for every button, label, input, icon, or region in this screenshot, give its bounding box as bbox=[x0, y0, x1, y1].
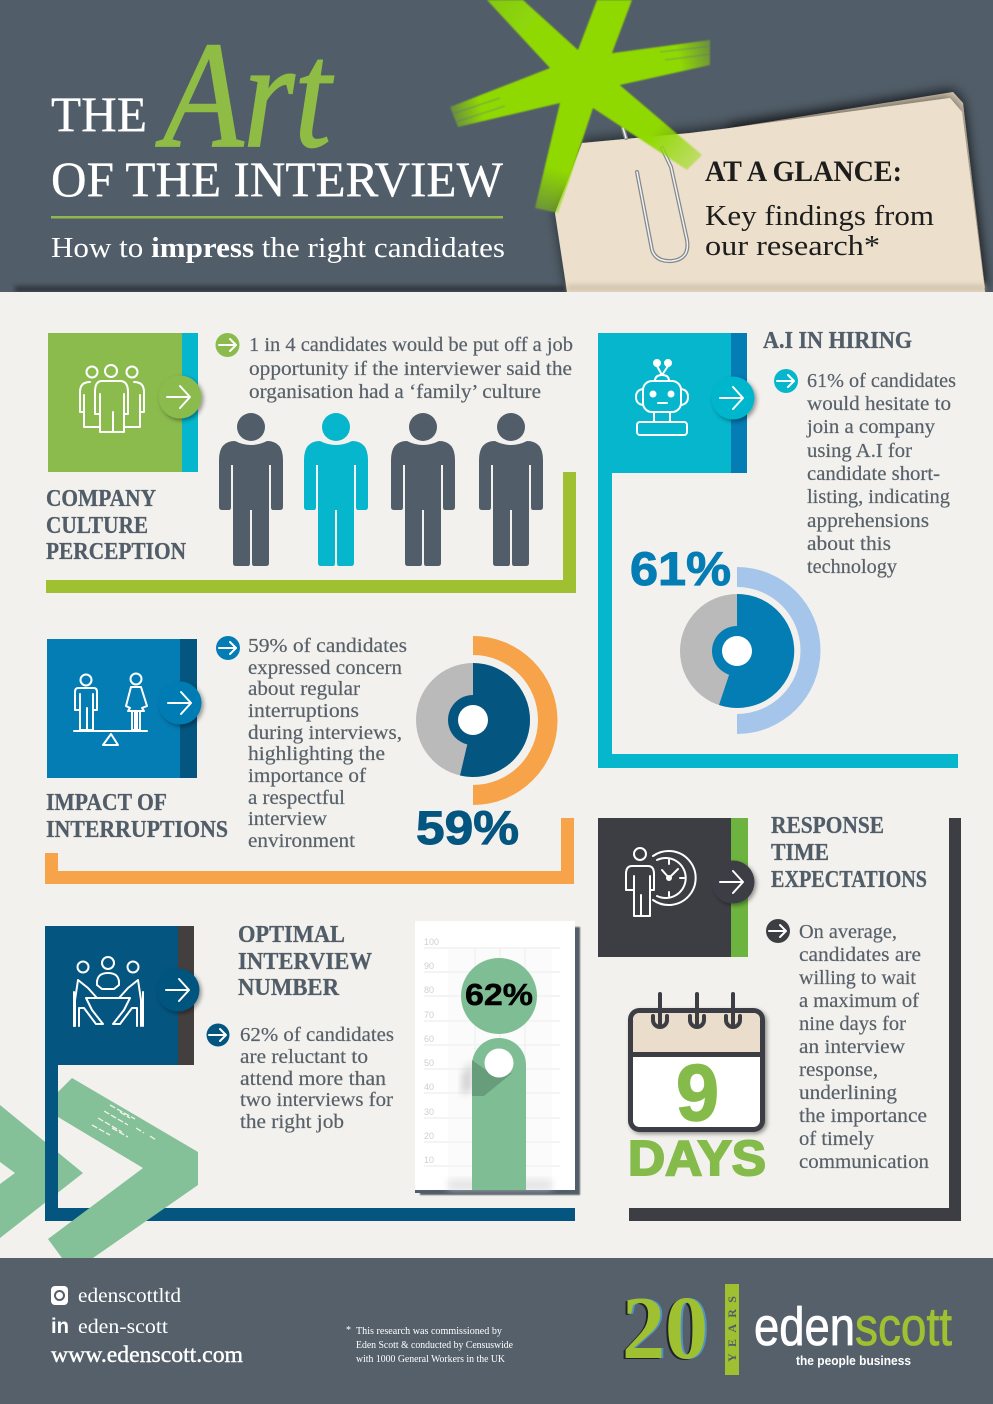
chart: thermometer 62% bbox=[415, 921, 580, 1195]
icon: person and clock bbox=[626, 848, 696, 916]
body text: 62% of candidates bbox=[240, 1024, 394, 1046]
research footnote: with 1000 General Workers in the UK bbox=[356, 1354, 506, 1365]
heading: INTERRUPTIONS bbox=[46, 817, 228, 843]
logo: eden scott: scott bbox=[855, 1297, 952, 1357]
research footnote: Eden Scott & conducted by Censuswide bbox=[356, 1340, 514, 1351]
body text: apprehensions bbox=[807, 510, 929, 532]
green asterisk brush mark bbox=[450, 0, 712, 213]
body text: the right job bbox=[240, 1111, 344, 1133]
handle: linkedin: eden-scott bbox=[78, 1316, 168, 1338]
bullet arrow bbox=[206, 1024, 230, 1046]
label: days: DAYS bbox=[628, 1132, 766, 1186]
chart: thermometer 62%: 10 bbox=[424, 1155, 434, 1165]
at a glance note text: AT A GLANCE: bbox=[705, 155, 902, 188]
panel: response time expectations bbox=[598, 813, 961, 1221]
icon tile: green bbox=[48, 333, 202, 472]
heading: COMPANY bbox=[46, 486, 156, 512]
bullet arrow bbox=[216, 636, 240, 660]
foreground brush chevron bbox=[48, 1078, 198, 1258]
heading: OPTIMAL bbox=[238, 922, 345, 948]
chart: thermometer 62%: 20 bbox=[424, 1131, 434, 1141]
body text: join a company bbox=[806, 416, 935, 438]
icon: instagram bbox=[51, 1286, 68, 1305]
chart: thermometer 62%: 50 bbox=[424, 1058, 434, 1068]
chart: thermometer 62%: 90 bbox=[424, 961, 434, 971]
body text: importance of bbox=[248, 765, 366, 787]
body text: 59% of candidates bbox=[248, 635, 407, 657]
body text: interruptions bbox=[248, 700, 359, 722]
at a glance note text bbox=[705, 155, 934, 262]
body text: technology bbox=[807, 556, 897, 578]
icon tile: charcoal bbox=[598, 818, 754, 957]
body text: interview bbox=[248, 808, 328, 830]
heading: EXPECTATIONS bbox=[771, 867, 927, 893]
heading: A.I IN HIRING bbox=[763, 328, 912, 354]
content background below header bbox=[0, 292, 993, 304]
pictogram: four people, one highlighted bbox=[219, 413, 543, 566]
chart: thermometer 62%: 30 bbox=[424, 1107, 434, 1117]
title: Art bbox=[155, 11, 334, 179]
calendar showing 9: 9 bbox=[676, 1048, 719, 1137]
title: OF THE INTERVIEW bbox=[51, 151, 504, 207]
website: www.edenscott.com bbox=[51, 1342, 243, 1367]
panel: impact of interruptions bbox=[45, 635, 574, 884]
body text bbox=[806, 370, 956, 578]
logo: eden scott: the people business bbox=[796, 1354, 911, 1368]
heading: CULTURE bbox=[46, 513, 148, 539]
calendar showing 9 bbox=[630, 994, 763, 1137]
body text: about this bbox=[807, 533, 891, 555]
research footnote: This research was commissioned by bbox=[356, 1326, 502, 1337]
chart: thermometer 62%: 80 bbox=[424, 985, 434, 995]
at a glance note text: Key findings from bbox=[705, 200, 934, 232]
logo: eden scott: eden bbox=[754, 1297, 855, 1357]
heading bbox=[238, 922, 372, 1001]
heading bbox=[46, 486, 187, 565]
panel: optimal interview number bbox=[0, 921, 580, 1258]
body text: attend more than bbox=[240, 1068, 386, 1090]
icon tile: navy bbox=[45, 926, 200, 1065]
body text: the importance bbox=[799, 1105, 927, 1127]
body text: communication bbox=[799, 1151, 929, 1173]
logo: 20 years: 20 bbox=[624, 1279, 710, 1378]
body text bbox=[249, 334, 573, 403]
chart: thermometer 62%: 100 bbox=[424, 937, 439, 947]
heading: NUMBER bbox=[238, 975, 340, 1001]
icon tile: blue bbox=[47, 639, 202, 778]
body text: a respectful bbox=[248, 787, 345, 809]
body text: listing, indicating bbox=[807, 486, 950, 508]
subtitle: How to impress the right candidates bbox=[51, 232, 505, 264]
body text: two interviews for bbox=[240, 1089, 393, 1111]
footer social links bbox=[51, 1285, 243, 1367]
bullet arrow bbox=[766, 919, 790, 943]
frame: teal bbox=[598, 473, 958, 768]
paper clip bbox=[623, 128, 687, 261]
logo: 20 years: 20 bbox=[622, 1279, 708, 1378]
chart: thermometer 62%: 62% bbox=[465, 977, 533, 1012]
body text: opportunity if the interviewer said the bbox=[249, 358, 572, 380]
body text: of timely bbox=[799, 1128, 874, 1150]
body text: environment bbox=[248, 830, 355, 852]
footer banner bbox=[0, 1258, 993, 1404]
panel: company culture perception bbox=[46, 333, 576, 593]
chart: thermometer 62%: 60 bbox=[424, 1034, 434, 1044]
bullet arrow bbox=[774, 369, 798, 393]
body text bbox=[799, 921, 929, 1173]
frame: navy bbox=[45, 1065, 575, 1221]
frame: orange bbox=[45, 818, 574, 884]
heading: INTERVIEW bbox=[238, 949, 372, 975]
body text: highlighting the bbox=[248, 743, 385, 765]
body text: candidate short- bbox=[807, 463, 940, 485]
icon: linkedin: in bbox=[51, 1315, 69, 1338]
left background chevron bbox=[0, 1105, 83, 1238]
research footnote bbox=[346, 1325, 514, 1365]
stat 59%: 59% bbox=[416, 801, 519, 854]
heading bbox=[46, 790, 228, 843]
header banner bbox=[0, 0, 993, 292]
body text: 1 in 4 candidates would be put off a job bbox=[249, 334, 573, 356]
body text bbox=[248, 635, 407, 852]
body text: an interview bbox=[799, 1036, 906, 1058]
title bbox=[51, 11, 504, 207]
body text: willing to wait bbox=[799, 967, 916, 989]
body text: during interviews, bbox=[248, 722, 402, 744]
body text: nine days for bbox=[799, 1013, 906, 1035]
logo: 20 years: YEARS bbox=[725, 1296, 739, 1362]
frame: charcoal bbox=[629, 818, 961, 1221]
body text: candidates are bbox=[799, 944, 921, 966]
heading: TIME bbox=[771, 840, 829, 866]
heading bbox=[771, 813, 927, 893]
title: THE bbox=[51, 86, 147, 142]
title rule bbox=[51, 216, 503, 218]
body text: expressed concern bbox=[248, 657, 402, 679]
heading: PERCEPTION bbox=[46, 539, 187, 565]
icon: interview meeting bbox=[74, 957, 143, 1026]
at a glance note text: our research* bbox=[705, 230, 880, 262]
heading: RESPONSE bbox=[771, 813, 884, 839]
body text: organisation had a ‘family’ culture bbox=[249, 381, 541, 403]
donut chart 59% bbox=[416, 636, 558, 805]
body text: response, bbox=[799, 1059, 878, 1081]
panel: A.I in hiring bbox=[598, 328, 958, 768]
body text: about regular bbox=[248, 678, 360, 700]
frame: green bbox=[46, 472, 576, 593]
research footnote: * bbox=[346, 1325, 351, 1336]
body text: using A.I for bbox=[807, 440, 912, 462]
body text bbox=[240, 1024, 394, 1133]
donut chart 61% bbox=[680, 567, 820, 734]
heading: IMPACT OF bbox=[46, 790, 167, 816]
icon: robot bbox=[636, 360, 688, 435]
logo: eden scott bbox=[754, 1297, 952, 1368]
body text: are reluctant to bbox=[240, 1046, 368, 1068]
bullet arrow bbox=[216, 333, 240, 357]
handle: instagram: edenscottltd bbox=[78, 1285, 181, 1307]
body text: On average, bbox=[799, 921, 897, 943]
icon: man and woman on balance bbox=[74, 674, 147, 745]
body text: a maximum of bbox=[799, 990, 919, 1012]
body text: underlining bbox=[799, 1082, 897, 1104]
stat 61%: 61% bbox=[630, 542, 731, 595]
body text: would hesitate to bbox=[807, 393, 951, 415]
logo: 20 years: 20 bbox=[620, 1280, 706, 1379]
chart: thermometer 62%: 40 bbox=[424, 1082, 434, 1092]
chart: thermometer 62%: 70 bbox=[424, 1010, 434, 1020]
icon tile: teal bbox=[598, 333, 754, 473]
body text: 61% of candidates bbox=[807, 370, 956, 392]
icon: three people bbox=[80, 365, 144, 432]
note paper bbox=[555, 92, 985, 292]
